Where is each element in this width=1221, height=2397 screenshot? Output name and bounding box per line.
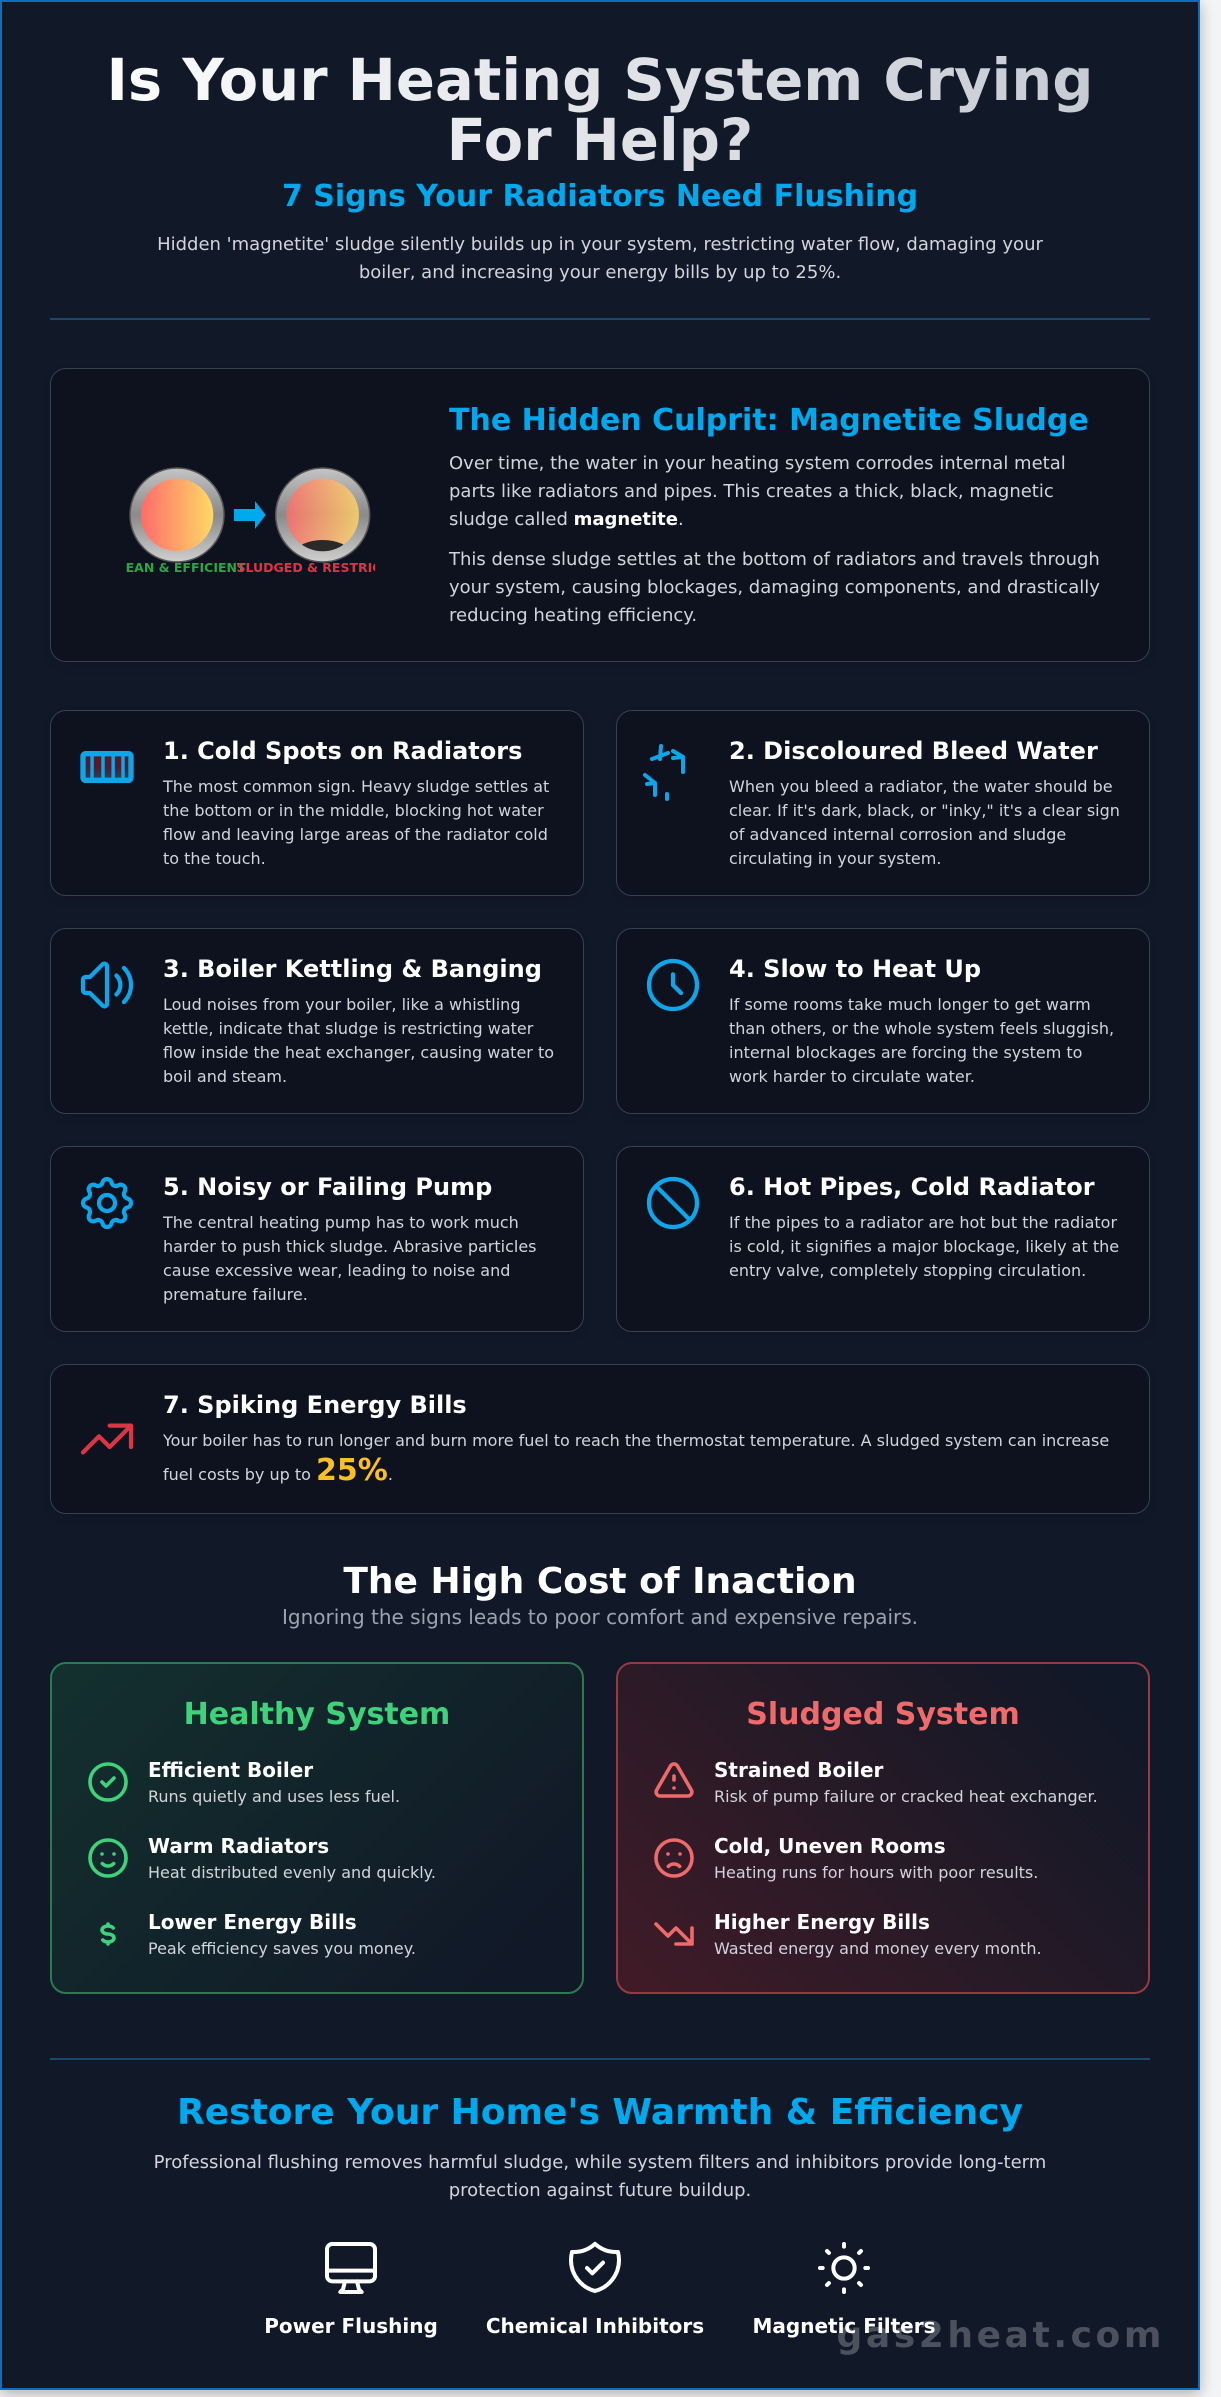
card text: work harder to circulate water.: [729, 1067, 975, 1086]
card text: to the touch.: [163, 849, 266, 868]
item text: Runs quietly and uses less fuel.: [148, 1787, 400, 1806]
card title: 4. Slow to Heat Up: [729, 955, 981, 983]
label: Power Flushing: [264, 2314, 438, 2338]
card text: flow and leaving large areas of the radiator cold: [163, 825, 548, 844]
solution: power flushing: [264, 2242, 438, 2338]
card text: If some rooms take much longer to get warm: [729, 995, 1091, 1014]
card text: is cold, it signifies a major blockage, likely at the: [729, 1237, 1119, 1256]
card title: 6. Hot Pipes, Cold Radiator: [729, 1173, 1095, 1201]
card: sign 2: [616, 710, 1150, 896]
card: sign 7: [50, 1364, 1150, 1514]
card: sign 4: [616, 928, 1150, 1114]
card text: kettle, indicate that sludge is restricting water: [163, 1019, 533, 1038]
panel heading: Sludged System: [746, 1697, 1020, 1732]
card title: 1. Cold Spots on Radiators: [163, 737, 522, 765]
card text: boil and steam.: [163, 1067, 287, 1086]
section heading: restore: Restore Your Home's Warmth & Efficiency: [177, 2092, 1023, 2133]
icon: rising trend: [80, 1424, 134, 1454]
icon: speaker: [80, 962, 134, 1008]
title: [50, 51, 1150, 171]
item: cold rooms: [654, 1834, 1038, 1882]
card text: of advanced internal corrosion and sludge: [729, 825, 1066, 844]
icon: blocked: [646, 1176, 700, 1230]
card title: 7. Spiking Energy Bills: [163, 1391, 467, 1419]
watermark: gas2heat.com: [836, 2315, 1165, 2356]
item: efficient boiler: [88, 1758, 400, 1806]
icon: warning: [654, 1762, 694, 1798]
icon: monitor: [325, 2242, 377, 2294]
item text: Risk of pump failure or cracked heat exchanger.: [714, 1787, 1098, 1806]
item: warm radiators: [88, 1834, 436, 1882]
panel heading: The Hidden Culprit: Magnetite Sludge: [449, 402, 1089, 438]
panel text: sludge called magnetite.: [449, 509, 684, 530]
icon: smile: [88, 1838, 128, 1878]
card title: 2. Discoloured Bleed Water: [729, 737, 1098, 765]
item: lower bills: [100, 1910, 416, 1958]
section text: [154, 2152, 1046, 2201]
item title: Lower Energy Bills: [148, 1910, 357, 1934]
card text: Loud noises from your boiler, like a whistling: [163, 995, 520, 1014]
card text: [163, 995, 554, 1086]
label: Magnetic Filters: [752, 2314, 936, 2338]
card text: fuel costs by up to 25%.: [163, 1453, 393, 1488]
card text: clear. If it's dark, black, or "inky," it's a clear sign: [729, 801, 1120, 820]
title: For Help?: [447, 107, 753, 174]
panel: sludged system: [616, 1662, 1150, 1994]
card title: 3. Boiler Kettling & Banging: [163, 955, 542, 983]
card text: internal blockages are forcing the system to: [729, 1043, 1082, 1062]
section subtitle: Ignoring the signs leads to poor comfort and expensive repairs.: [282, 1605, 918, 1629]
card text: [729, 777, 1120, 868]
panel text: [448, 453, 1100, 626]
item: strained boiler: [654, 1758, 1098, 1806]
panel text: parts like radiators and pipes. This creates a thick, black, magnetic: [449, 481, 1054, 502]
card: sign 6: [616, 1146, 1150, 1332]
panel text: your system, causing blockages, damaging components, and drastically: [449, 577, 1100, 598]
panel text: This dense sludge settles at the bottom of radiators and travels through: [449, 549, 1100, 570]
card text: [163, 1431, 1109, 1488]
panel: healthy system: [50, 1662, 584, 1994]
card text: premature failure.: [163, 1285, 308, 1304]
card text: than others, or the whole system feels sluggish,: [729, 1019, 1114, 1038]
item title: Warm Radiators: [148, 1834, 329, 1858]
label: Chemical Inhibitors: [486, 2314, 704, 2338]
card text: [162, 777, 549, 868]
solution: magnetic filters: [752, 2242, 936, 2338]
icon: gear: [80, 1176, 134, 1230]
section text: protection against future buildup.: [449, 2180, 751, 2201]
item title: Higher Energy Bills: [714, 1910, 930, 1934]
card text: [729, 995, 1114, 1086]
intro text: Hidden 'magnetite' sludge silently builds up in your system, restricting water flow, damaging your: [157, 234, 1043, 255]
item text: Heating runs for hours with poor results.: [714, 1863, 1038, 1882]
card text: cause excessive wear, leading to noise and: [163, 1261, 510, 1280]
item text: Peak efficiency saves you money.: [148, 1939, 416, 1958]
icon: sun: [818, 2242, 870, 2294]
card text: entry valve, completely stopping circulation.: [729, 1261, 1086, 1280]
item: higher bills: [654, 1910, 1042, 1958]
card text: [729, 1213, 1119, 1280]
icon: sad face: [654, 1838, 694, 1878]
icon: clock: [646, 958, 700, 1012]
section text: Professional flushing removes harmful sludge, while system filters and inhibitors provide long-term: [154, 2152, 1046, 2173]
card text: When you bleed a radiator, the water should be: [729, 777, 1113, 796]
card title: 5. Noisy or Failing Pump: [163, 1173, 492, 1201]
card text: flow inside the heat exchanger, causing water to: [163, 1043, 554, 1062]
panel: the hidden culprit: [50, 368, 1150, 662]
item text: Wasted energy and money every month.: [714, 1939, 1042, 1958]
card: sign 3: [50, 928, 584, 1114]
card: sign 5: [50, 1146, 584, 1332]
item title: Strained Boiler: [714, 1758, 883, 1782]
card text: circulating in your system.: [729, 849, 941, 868]
card text: The central heating pump has to work much: [163, 1213, 519, 1232]
intro text: [157, 234, 1043, 283]
icon: falling trend: [654, 1922, 694, 1946]
card text: The most common sign. Heavy sludge settles at: [163, 777, 549, 796]
panel heading: Healthy System: [184, 1697, 450, 1732]
panel text: Over time, the water in your heating system corrodes internal metal: [449, 453, 1066, 474]
item title: Efficient Boiler: [148, 1758, 313, 1782]
item text: Heat distributed evenly and quickly.: [148, 1863, 436, 1882]
title: Is Your Heating System Crying: [106, 47, 1094, 114]
solution: chemical inhibitors: [486, 2242, 704, 2338]
intro text: boiler, and increasing your energy bills by up to 25%.: [359, 262, 841, 283]
card text: harder to push thick sludge. Abrasive particles: [163, 1237, 537, 1256]
icon: shield: [569, 2242, 621, 2293]
subtitle: 7 Signs Your Radiators Need Flushing: [282, 179, 918, 214]
icon: check: [88, 1762, 128, 1802]
item title: Cold, Uneven Rooms: [714, 1834, 946, 1858]
panel text: reducing heating efficiency.: [449, 605, 697, 626]
card text: If the pipes to a radiator are hot but the radiator: [729, 1213, 1117, 1232]
icon: dollar: [100, 1922, 116, 1946]
icon: broken water drop: [642, 744, 685, 801]
section heading: cost of inaction: The High Cost of Inaction: [343, 1561, 857, 1602]
card: sign 1: [50, 710, 584, 896]
card text: the bottom or in the middle, blocking hot water: [163, 801, 544, 820]
card text: Your boiler has to run longer and burn more fuel to reach the thermostat temperature. A sludged system can increase: [163, 1431, 1109, 1450]
card text: [162, 1213, 537, 1304]
diagram: clean vs sludged pipe: [126, 467, 375, 575]
icon: radiator: [80, 751, 134, 783]
